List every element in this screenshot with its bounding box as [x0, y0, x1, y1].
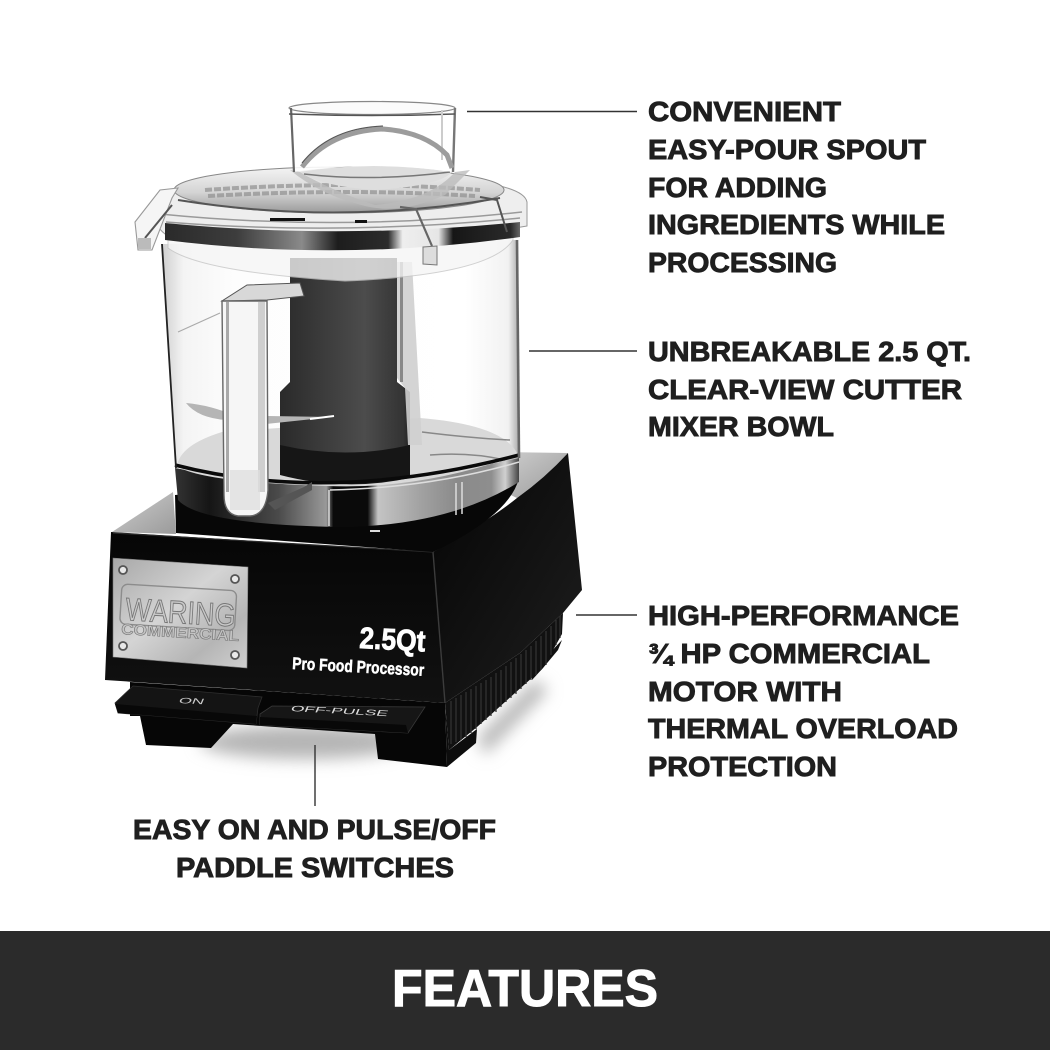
blade: [186, 403, 332, 424]
lid: [135, 166, 527, 265]
measure mark: [178, 313, 220, 332]
callout: motor: ¾ HP COMMERCIAL: [648, 638, 930, 669]
badge plate: WARING: [125, 591, 237, 634]
capacity text: 2.5Qt: [359, 622, 426, 658]
callout: spout: CONVENIENT: [648, 96, 841, 127]
callout: spout: [648, 96, 945, 278]
model text: Pro Food Processor: [292, 654, 425, 680]
callout line: switches: [314, 745, 316, 806]
bowl walls: [162, 244, 176, 468]
column glass reflection: [397, 262, 422, 445]
bowl floor: [177, 418, 518, 486]
callout: bowl: MIXER BOWL: [648, 411, 834, 442]
lid outer rim: [153, 186, 527, 244]
chute opening on lid: [290, 170, 470, 209]
rear foot: [532, 640, 562, 680]
callout: spout: INGREDIENTS WHILE: [648, 209, 945, 240]
central drive column: [280, 258, 410, 481]
pour spout: [289, 102, 455, 172]
badge plate: [113, 558, 248, 668]
callout: spout: EASY-POUR SPOUT: [648, 134, 926, 165]
callout: motor: [648, 600, 959, 782]
callout: spout: PROCESSING: [648, 247, 837, 278]
spout arch: [302, 129, 452, 168]
ground shadow: [200, 680, 548, 759]
bowl floor rim line: [175, 455, 519, 483]
rim lines: [160, 212, 522, 228]
front face: [105, 532, 445, 703]
motor base: [105, 452, 582, 767]
bowl body: [162, 235, 519, 486]
left latch: [135, 188, 178, 250]
bowl collar on base: [175, 465, 519, 552]
callout: bowl: [648, 336, 971, 442]
dark under-body and front foot: [130, 682, 447, 767]
callout: motor: HIGH-PERFORMANCE: [648, 600, 959, 631]
callout: switches: EASY ON AND PULSE/OFF: [133, 814, 496, 845]
callout: motor: PROTECTION: [648, 751, 837, 782]
plate screws: [119, 566, 239, 659]
callout: motor: THERMAL OVERLOAD: [648, 713, 958, 744]
callout line: bowl: [529, 350, 637, 352]
dark rim band: [165, 222, 520, 250]
shoulder band: [168, 235, 513, 281]
side face: [433, 453, 582, 703]
callout: switches: PADDLE SWITCHES: [176, 852, 454, 883]
chrome ring: [175, 458, 519, 527]
product: food processor: [105, 102, 582, 767]
badge plate: COMMERCIAL: [121, 621, 240, 645]
paddle: on: ON: [177, 696, 206, 706]
handle: [222, 283, 312, 516]
callout line: spout: [467, 110, 637, 112]
callout line: motor: [576, 614, 637, 616]
callout: motor: MOTOR WITH: [648, 676, 842, 707]
paddle: off-pulse: OFF-PULSE: [289, 704, 391, 718]
callout: switches: [133, 814, 496, 883]
callout: bowl: UNBREAKABLE 2.5 QT.: [648, 336, 971, 367]
callout: bowl: CLEAR-VIEW CUTTER: [648, 374, 962, 405]
paddle: off-pulse: [260, 704, 425, 733]
right latch: [400, 197, 507, 265]
vented side skirt: [445, 613, 563, 750]
callout: spout: FOR ADDING: [648, 172, 827, 203]
paddle: on: [115, 686, 262, 724]
footer title: FEATURES: [392, 960, 658, 1018]
footer band: [0, 931, 1050, 1050]
top face: [112, 492, 176, 534]
lid top: [174, 167, 504, 213]
